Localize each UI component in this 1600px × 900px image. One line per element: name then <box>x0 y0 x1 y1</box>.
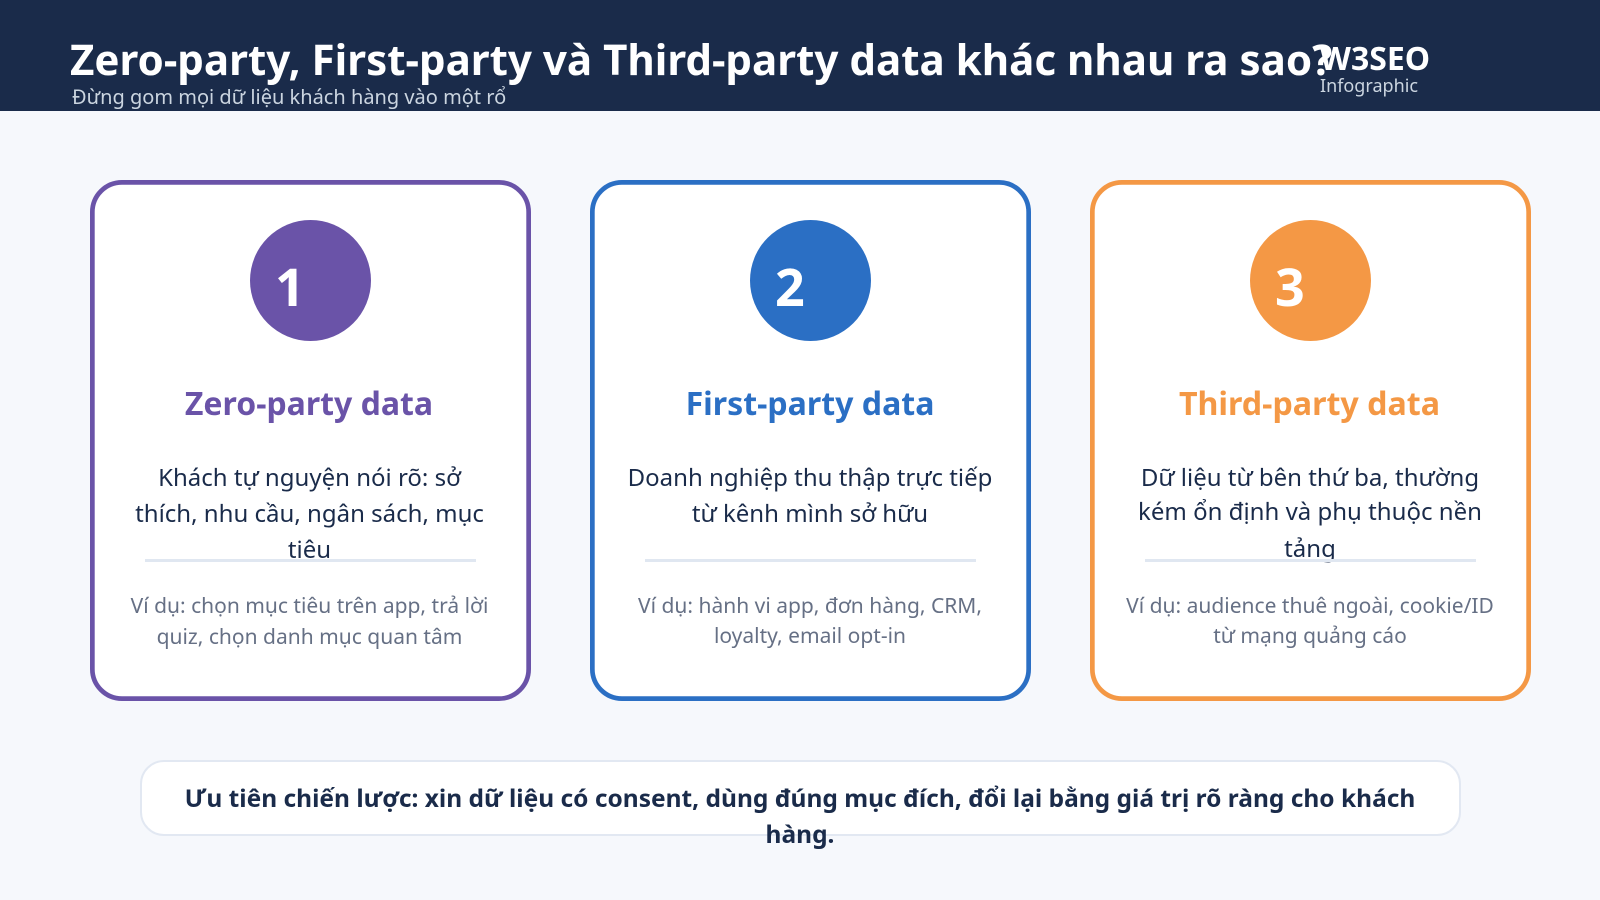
number 3: 3 <box>1275 251 1305 322</box>
callout box <box>140 760 1461 836</box>
callout text: Ưu tiên chiến lược: xin dữ liệu có consent, dùng đúng mục đích, đổi lại bằng giá trị rõ ràng cho khách <box>185 782 1415 815</box>
description: third-party: Dữ liệu từ bên thứ ba, thường <box>1141 461 1479 494</box>
description: third-party <box>1138 461 1482 565</box>
description: zero-party: Khách tự nguyện nói rõ: sở <box>158 461 461 494</box>
example: zero-party <box>130 592 488 650</box>
number 2: 2 <box>775 251 805 322</box>
description: first-party <box>628 461 992 530</box>
description: zero-party <box>135 461 484 566</box>
panel: first-party <box>590 180 1031 701</box>
example: third-party: Ví dụ: audience thuê ngoài, cookie/ID <box>1126 592 1494 620</box>
description: zero-party: tiêu <box>288 533 331 566</box>
heading: first-party: First-party data <box>686 382 934 425</box>
brand name: W3SEO <box>1320 37 1430 80</box>
example: third-party <box>1126 592 1494 650</box>
divider <box>145 559 476 562</box>
description: first-party: từ kênh mình sở hữu <box>692 497 928 530</box>
subtitle: Đừng gom mọi dữ liệu khách hàng vào một rổ <box>72 83 506 110</box>
example: third-party: từ mạng quảng cáo <box>1213 622 1407 650</box>
icon: number 2 <box>750 220 871 341</box>
panel: zero-party <box>90 180 531 701</box>
header band <box>0 0 1600 111</box>
description: zero-party: thích, nhu cầu, ngân sách, mục <box>135 497 484 530</box>
example: zero-party: Ví dụ: chọn mục tiêu trên app, trả lời <box>131 592 488 620</box>
icon: number 3 <box>1250 220 1371 341</box>
heading: zero-party: Zero-party data <box>185 382 433 425</box>
description: first-party: Doanh nghiệp thu thập trực tiếp <box>628 461 992 494</box>
divider <box>645 559 976 562</box>
panel: third-party <box>1090 180 1531 701</box>
icon: number 1 <box>250 220 371 341</box>
title: Zero-party, First-party và Third-party data khác nhau ra sao? <box>70 31 1332 88</box>
description: third-party: tảng <box>1284 532 1336 565</box>
heading: third-party: Third-party data <box>1179 382 1440 425</box>
example: first-party: loyalty, email opt-in <box>714 622 906 650</box>
example: first-party: Ví dụ: hành vi app, đơn hàng, CRM, <box>638 592 982 620</box>
description: third-party: kém ổn định và phụ thuộc nền <box>1138 495 1482 528</box>
example: first-party <box>638 592 982 650</box>
divider <box>1145 559 1476 562</box>
callout text <box>185 782 1415 851</box>
number 1: 1 <box>275 251 305 322</box>
callout text: hàng. <box>766 818 834 851</box>
brand tag: Infographic <box>1320 74 1418 98</box>
example: zero-party: quiz, chọn danh mục quan tâm <box>157 622 462 650</box>
